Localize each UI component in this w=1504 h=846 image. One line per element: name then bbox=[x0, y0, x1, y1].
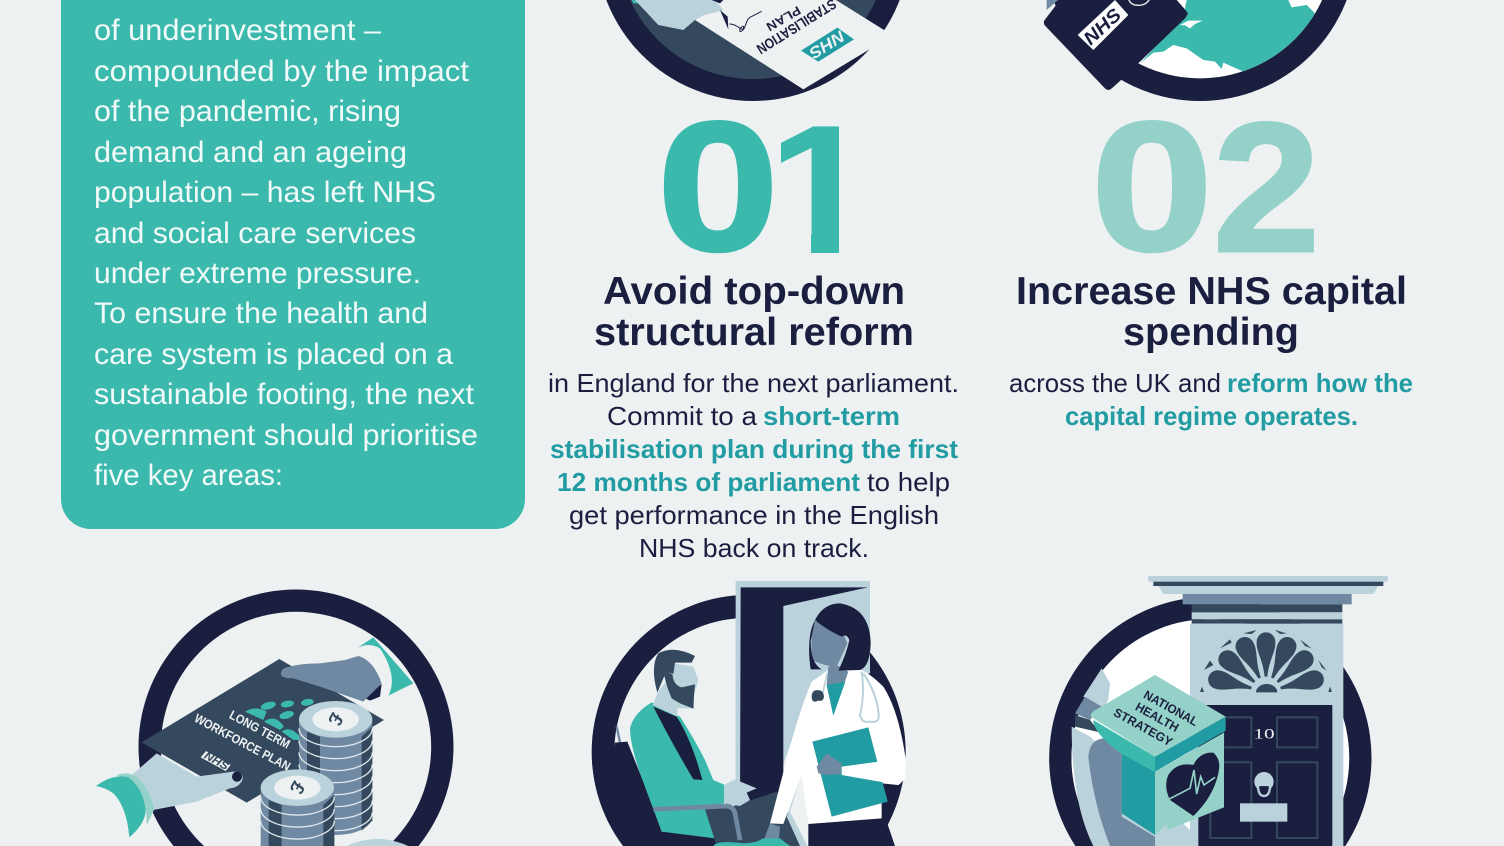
icon: coin stack front bbox=[261, 769, 334, 846]
icon: stabilisation plan bbox=[596, 0, 910, 101]
introduction text: of underinvestment – bbox=[94, 14, 381, 47]
icon: upper hand bbox=[281, 637, 413, 702]
number 01 bbox=[664, 120, 839, 254]
fanlight bbox=[1200, 630, 1332, 697]
door number: 10 bbox=[1253, 726, 1275, 742]
icon: man in wheelchair bbox=[607, 650, 805, 846]
introduction text: population – has left NHS bbox=[94, 176, 436, 209]
box: national health strategy: STRATEGY bbox=[1111, 705, 1176, 750]
number 01: 0 bbox=[657, 83, 779, 289]
icon: people on plan bbox=[245, 698, 314, 740]
door knocker bbox=[1254, 772, 1274, 796]
introduction text: compounded by the impact bbox=[94, 55, 470, 88]
icon: coin stack back: £ bbox=[323, 709, 347, 729]
heading: avoid reform: structural reform bbox=[594, 311, 914, 354]
introduction text: sustainable footing, the next bbox=[94, 378, 475, 411]
icon: long term workforce plan bbox=[96, 590, 453, 846]
text: priority 2 body: reform how the bbox=[1227, 368, 1413, 398]
text: priority 1 body: in England for the next parliament. bbox=[548, 368, 959, 398]
introduction text bbox=[94, 14, 478, 492]
heading: capital spending bbox=[1016, 270, 1407, 354]
icon: globe and NHS wallet: NHS bbox=[1079, 4, 1126, 49]
panel: introduction bbox=[61, 0, 525, 529]
person carrying box bbox=[1072, 668, 1190, 846]
introduction text: care system is placed on a bbox=[94, 338, 453, 371]
icon: stabilisation plan: PLAN bbox=[764, 3, 803, 34]
icon: long term workforce plan: LONG TERM bbox=[227, 708, 292, 752]
text: priority 2 body: capital regime operates. bbox=[1065, 401, 1358, 431]
introduction text: under extreme pressure. bbox=[94, 257, 421, 290]
heading: capital spending: spending bbox=[1123, 311, 1299, 354]
number 01: 1 bbox=[757, 86, 887, 292]
heading: avoid reform: Avoid top-down bbox=[603, 270, 905, 313]
icon: long term workforce plan: WORKFORCE PLAN bbox=[192, 711, 293, 774]
number 02 bbox=[1091, 83, 1320, 290]
text: priority 1 body: short-term bbox=[763, 401, 900, 431]
icon: globe and NHS wallet bbox=[1043, 0, 1357, 101]
text: priority 1 body: Commit to a bbox=[607, 401, 758, 431]
icon: coin stack back bbox=[299, 701, 372, 835]
introduction text: of the pandemic, rising bbox=[94, 95, 401, 128]
heading: capital spending: Increase NHS capital bbox=[1016, 270, 1407, 313]
text: priority 1 body: stabilisation plan during the first bbox=[550, 434, 958, 464]
door bbox=[736, 581, 870, 783]
icon: patient and doctor bbox=[592, 581, 906, 846]
number 02: 2 bbox=[1213, 84, 1320, 290]
introduction text: five key areas: bbox=[94, 459, 283, 492]
text: priority 1 body: 12 months of parliament bbox=[557, 467, 860, 497]
introduction text: government should prioritise bbox=[94, 419, 478, 452]
number 02: 0 bbox=[1091, 83, 1213, 289]
introduction text: To ensure the health and bbox=[94, 297, 428, 330]
icon: coin stack front: £ bbox=[285, 777, 308, 797]
box: national health strategy bbox=[1091, 675, 1226, 846]
icon: number 10 and national health strategy bbox=[1049, 576, 1388, 846]
door bbox=[1198, 705, 1332, 846]
text: priority 1 body: NHS back on track. bbox=[639, 533, 869, 563]
icon: lower hand bbox=[96, 753, 243, 837]
introduction text: and social care services bbox=[94, 217, 416, 250]
box: national health strategy: NATIONAL bbox=[1141, 688, 1201, 729]
icon: heart with pulse bbox=[1166, 753, 1219, 816]
icon: doctor bbox=[713, 603, 906, 846]
text: priority 1 body: to help bbox=[867, 467, 950, 497]
icon: long term workforce plan: NHS bbox=[202, 750, 230, 773]
text: priority 2 body: across the UK and bbox=[1009, 368, 1221, 398]
text: priority 1 body: get performance in the English bbox=[569, 500, 939, 530]
introduction text: demand and an ageing bbox=[94, 136, 407, 169]
text: priority 1 body bbox=[548, 368, 959, 563]
heading: avoid reform bbox=[594, 270, 914, 354]
box: national health strategy: HEALTH bbox=[1133, 700, 1181, 735]
building bbox=[1148, 576, 1388, 846]
icon: stabilisation plan: NHS bbox=[805, 27, 847, 62]
text: priority 2 body bbox=[1009, 368, 1413, 431]
